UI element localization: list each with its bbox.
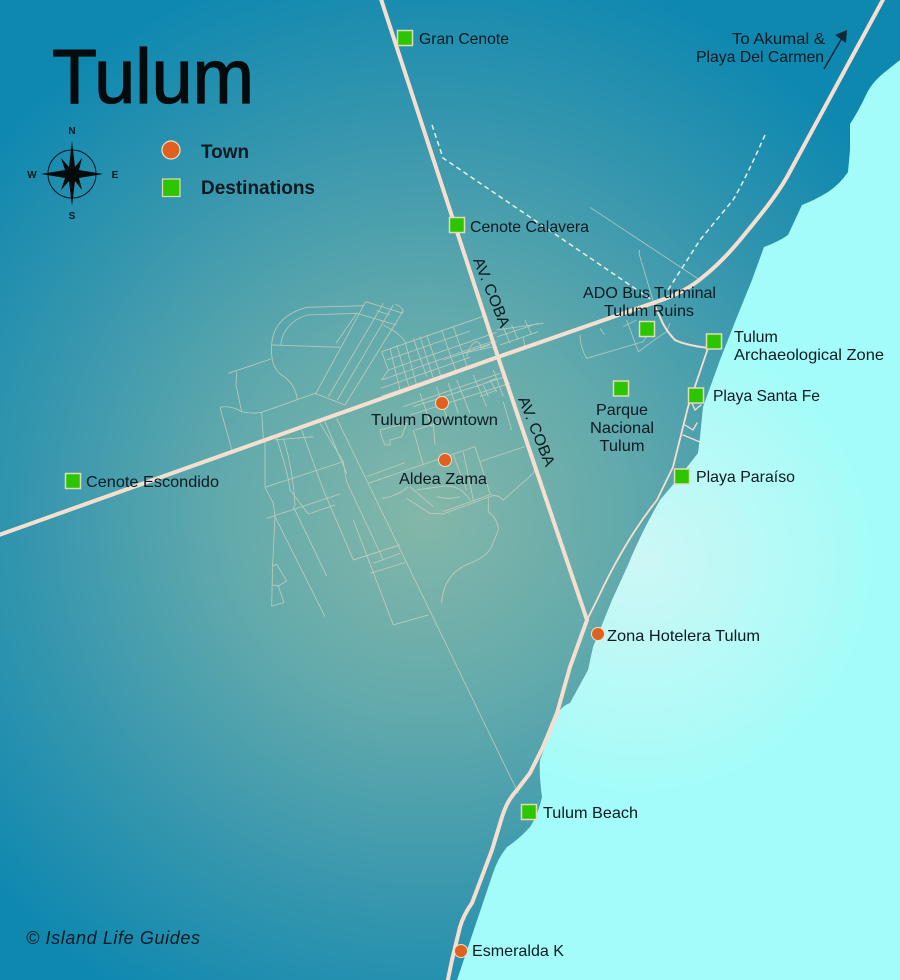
copyright credit: © Island Life Guides	[26, 928, 200, 948]
town: Aldea Zama	[399, 454, 487, 488]
dashed trails	[432, 125, 765, 300]
town: Esmeralda K: Esmeralda K	[472, 943, 564, 960]
label: to Akumal: To Akumal &	[732, 31, 825, 48]
marker: Parque Nacional Tulum: Parque	[596, 402, 648, 419]
marker: Tulum Archaeological Zone: Tulum	[734, 329, 778, 346]
icon: compass rose: S	[69, 211, 76, 222]
icon: compass rose: W	[27, 170, 37, 181]
road: highway 307	[0, 0, 885, 536]
marker: Gran Cenote: Gran Cenote	[419, 31, 509, 48]
road: beach road	[587, 348, 708, 620]
minor street network	[220, 302, 543, 793]
legend	[162, 141, 315, 199]
marker: Cenote Escondido: Cenote Escondido	[86, 474, 219, 491]
icon: compass rose: E	[112, 170, 119, 181]
marker: Parque Nacional Tulum: Nacional	[590, 420, 654, 437]
marker: Cenote Calavera: Cenote Calavera	[470, 219, 589, 236]
legend: town label: Town	[201, 142, 249, 163]
road: archaeological zone access	[653, 302, 708, 348]
marker: Tulum Archaeological Zone: Archaeological Zone	[734, 347, 884, 364]
title: Tulum	[52, 34, 254, 120]
icon: compass rose: N	[68, 126, 76, 137]
marker: Playa Paraiso: Playa Paraíso	[696, 469, 795, 486]
town: Tulum Downtown	[371, 396, 498, 429]
legend: destination label: Destinations	[201, 178, 315, 199]
icon: compass rose	[27, 126, 119, 222]
beach side streets	[683, 403, 701, 442]
marker: Tulum Archaeological Zone	[706, 329, 884, 364]
marker: ADO Bus Terminal and Tulum Ruins: ADO Bus Turminal	[583, 285, 716, 302]
town: Zona Hotelera Tulum: Zona Hotelera Tulum	[607, 628, 760, 645]
road label: Av. Coba south: AV. COBA	[514, 394, 558, 470]
minor roads near the ruins	[580, 207, 700, 358]
town: Tulum Downtown: Tulum Downtown	[371, 412, 498, 429]
marker: Parque Nacional Tulum	[590, 381, 654, 455]
sea	[457, 60, 900, 980]
label: to Playa del Carmen: Playa Del Carmen	[696, 49, 824, 66]
marker: Playa Santa Fe: Playa Santa Fe	[713, 388, 820, 405]
legend: destination marker	[162, 179, 180, 196]
arrow: to Akumal and Playa del Carmen	[824, 30, 847, 69]
road label: Av. Coba north: AV. COBA	[469, 255, 513, 331]
marker: Tulum Beach: Tulum Beach	[543, 805, 638, 822]
legend: town marker	[162, 141, 180, 159]
marker: ADO Bus Terminal and Tulum Ruins: Tulum Ruins	[604, 303, 694, 320]
town: Aldea Zama: Aldea Zama	[399, 471, 487, 488]
road: southern coast	[447, 620, 587, 980]
marker: ADO Bus Terminal and Tulum Ruins	[583, 285, 716, 336]
marker: Parque Nacional Tulum: Tulum	[600, 438, 644, 455]
road: Avenida Coba	[380, 0, 587, 620]
